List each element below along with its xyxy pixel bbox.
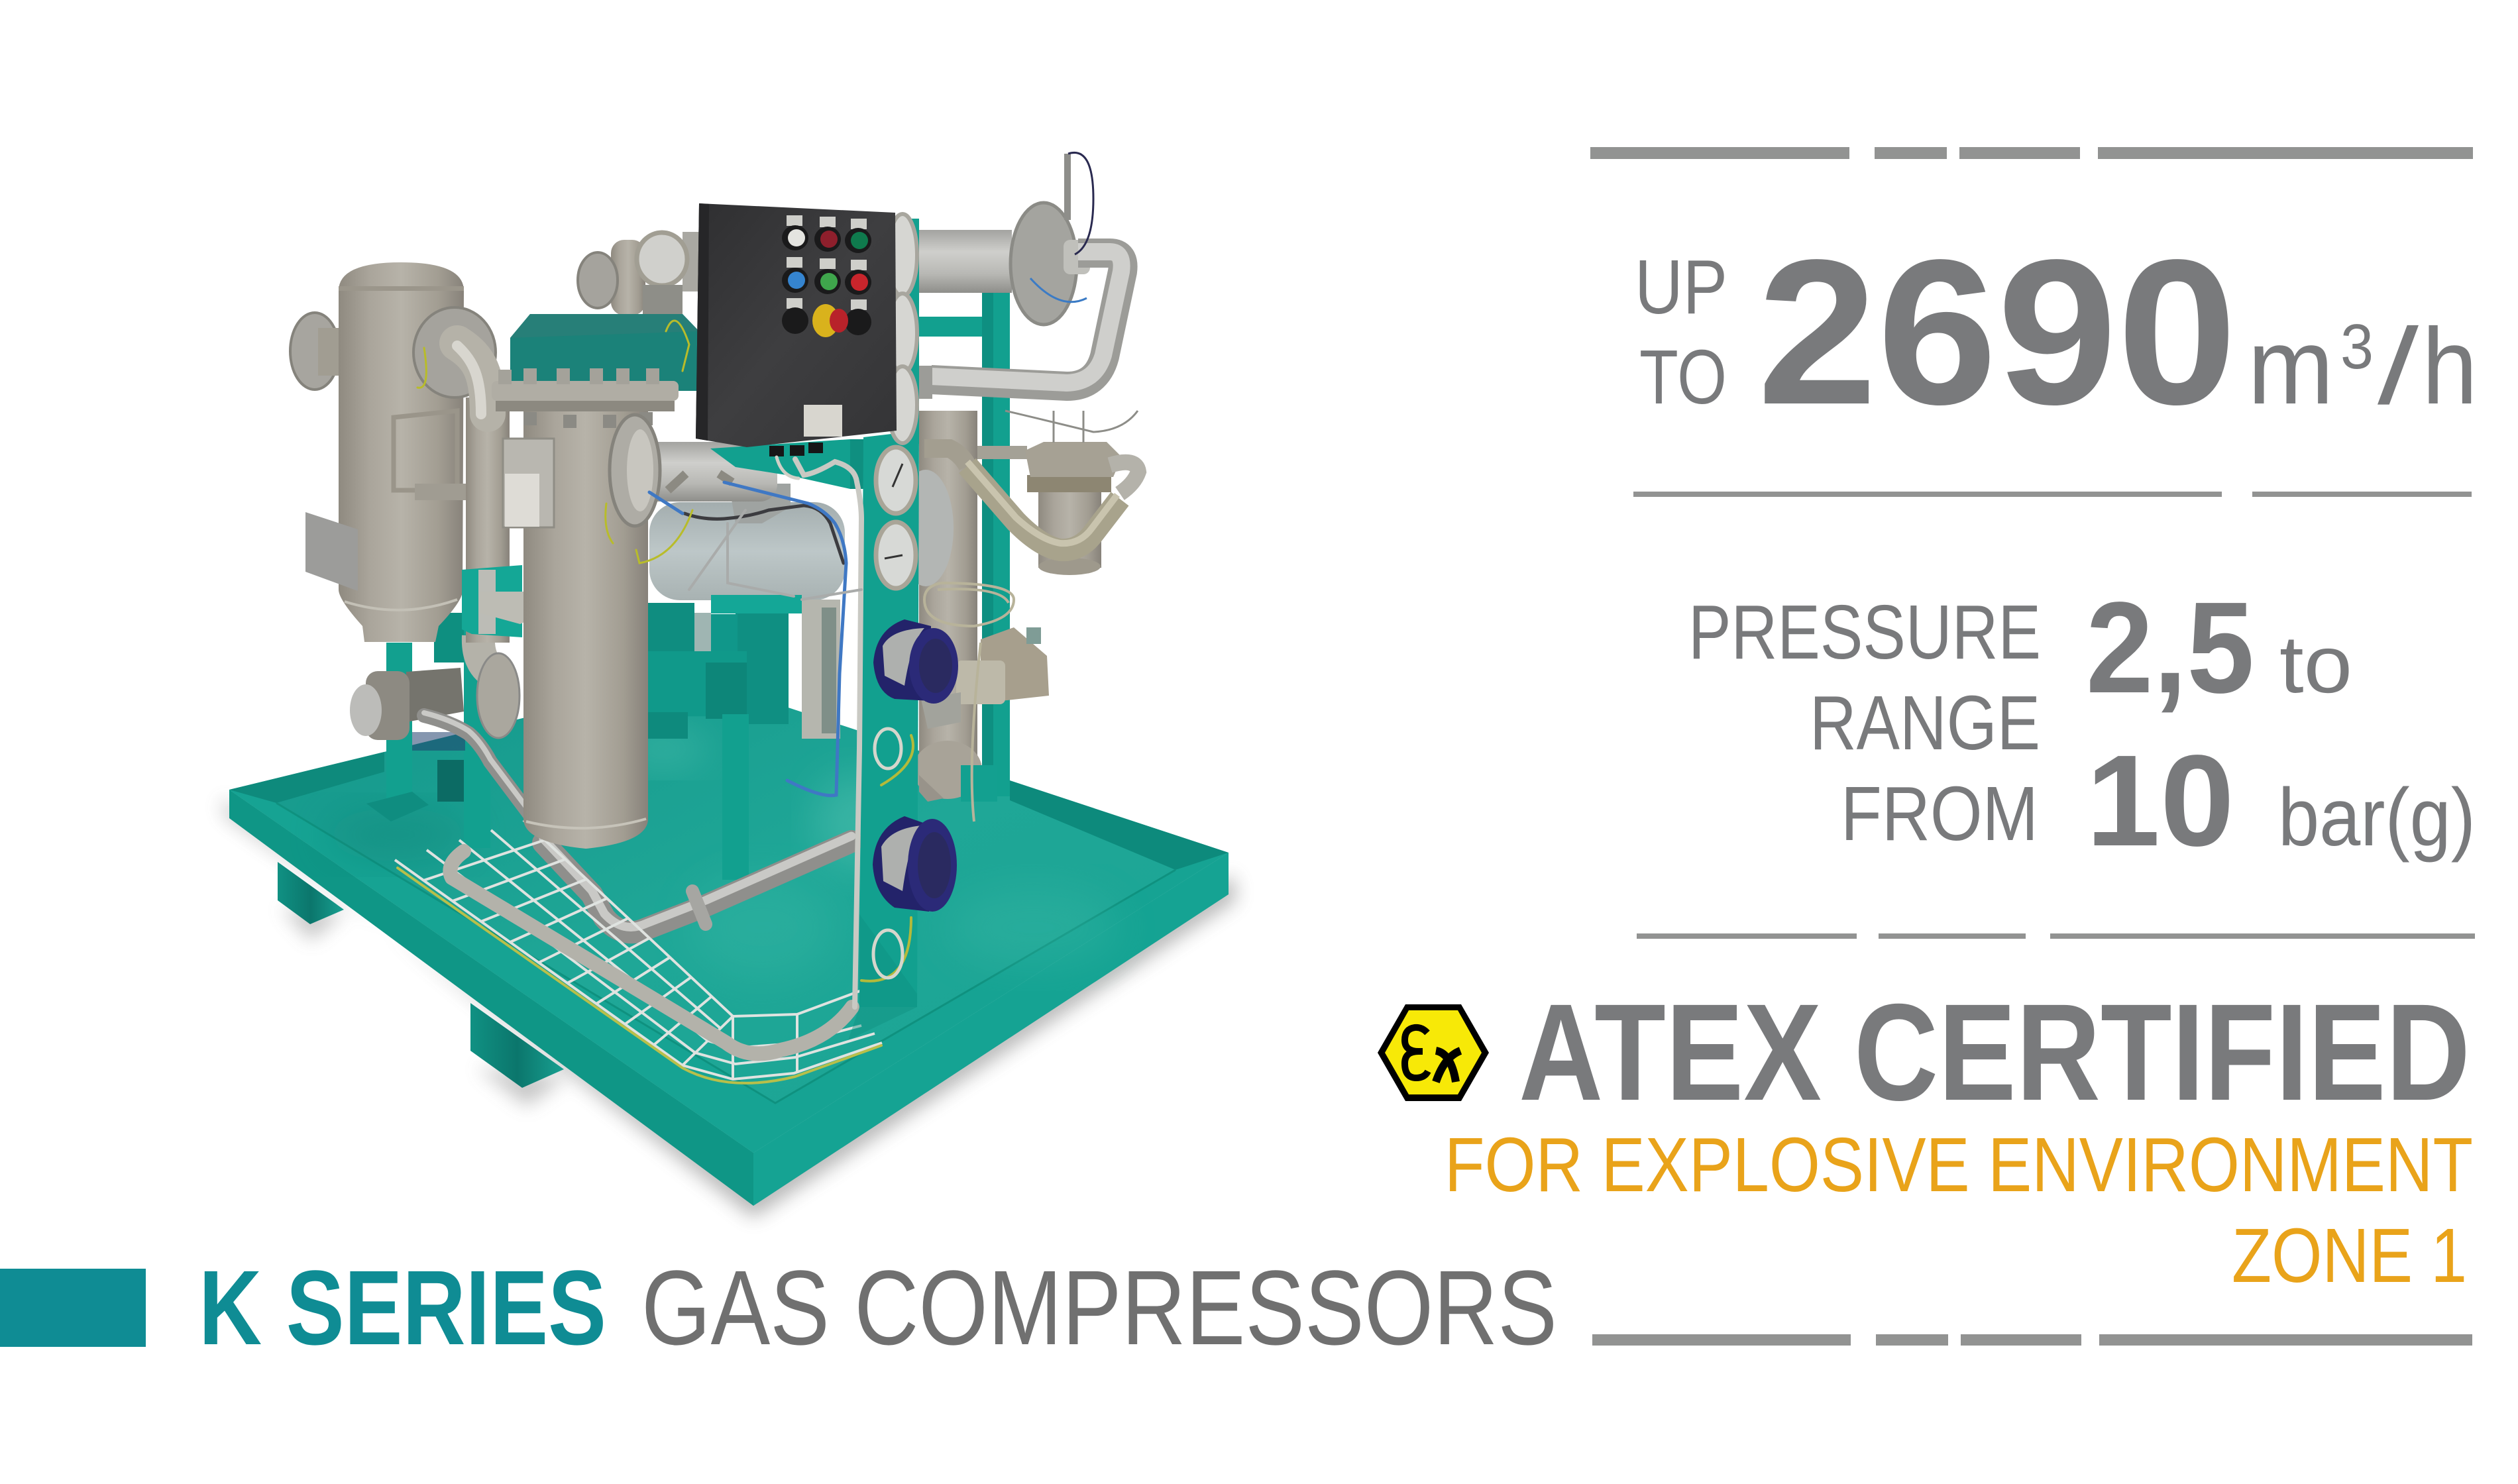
dashed rule: top [1590, 147, 2473, 159]
subheading: explosive environment zone [1445, 1122, 2473, 1298]
value: 2,5 to: to [2279, 619, 2352, 710]
lower left valve [350, 636, 520, 740]
discharge pipe [424, 713, 851, 932]
icon: ATEX Ex hexagon [1378, 1004, 1489, 1101]
pressure gauges on column [876, 214, 917, 588]
control panel [696, 203, 897, 456]
green motor cover [510, 314, 699, 391]
wiring on column and nozzle [417, 321, 913, 1007]
pressure range block [1688, 575, 2476, 873]
right gas filter and braided hose [924, 411, 1138, 575]
label: UP TO: UP [1635, 244, 1727, 330]
label: PRESSURE RANGE FROM: FROM [1841, 770, 2038, 857]
value: 2690: 2690 [1757, 217, 2237, 448]
upper right vessel, flange and pipe [919, 152, 1123, 399]
footer accent bar [0, 1269, 146, 1347]
title: GAS COMPRESSORS: GAS COMPRESSORS [641, 1248, 1557, 1367]
skid feet [278, 862, 564, 1088]
value: 10 bar(g): 10 [2086, 728, 2234, 873]
value: 10 bar(g): bar(g) [2278, 772, 2476, 863]
central green frame [366, 595, 802, 880]
unit: cubic metres per hour: h [2422, 305, 2478, 427]
rear structure: uprights and tank [898, 293, 1010, 802]
label: PRESSURE RANGE FROM: PRESSURE [1688, 589, 2041, 675]
label: PRESSURE RANGE FROM: RANGE [1810, 680, 2040, 766]
dashed rule: bottom [1592, 1334, 2472, 1346]
skid tray [229, 676, 1229, 1206]
unit: cubic metres per hour [2248, 305, 2478, 427]
unit: cubic metres per hour: 3 [2340, 311, 2374, 382]
cable bundle in tray [398, 851, 881, 1083]
left vessel with flanges and piping [290, 262, 510, 643]
label: UP TO: TO [1639, 334, 1727, 420]
skid shadow [222, 798, 1236, 1218]
inlet nozzle on filter [610, 415, 777, 526]
dashed rule: middle [1633, 492, 2472, 497]
central green column [710, 219, 919, 1040]
cable tray [395, 820, 882, 1079]
dashed rule: lower [1637, 933, 2475, 939]
explosion-proof blue junction boxes [873, 619, 958, 912]
unit: cubic metres per hour: m [2248, 305, 2334, 427]
subheading: explosive environment zone: ZONE 1 [2232, 1212, 2467, 1298]
value: 2,5 to [2086, 575, 2352, 720]
flow rate block [1635, 217, 2478, 448]
rear gauge and pipe stack [578, 232, 702, 325]
value: 2,5 to: 2,5 [2086, 575, 2254, 720]
title [199, 1248, 1557, 1367]
compressor body [649, 484, 845, 739]
label: PRESSURE RANGE FROM [1688, 589, 2041, 857]
product photo: gas compressor package [222, 152, 1236, 1218]
title: K SERIES: K SERIES [199, 1248, 606, 1367]
unit: cubic metres per hour: / [2378, 305, 2419, 427]
green bracket with clamp [462, 565, 543, 637]
lower right flexible joint and capillary loops [921, 583, 1049, 822]
front filter vessel [492, 368, 679, 849]
label: UP TO [1635, 244, 1727, 420]
value: 10 bar(g) [2086, 728, 2476, 873]
